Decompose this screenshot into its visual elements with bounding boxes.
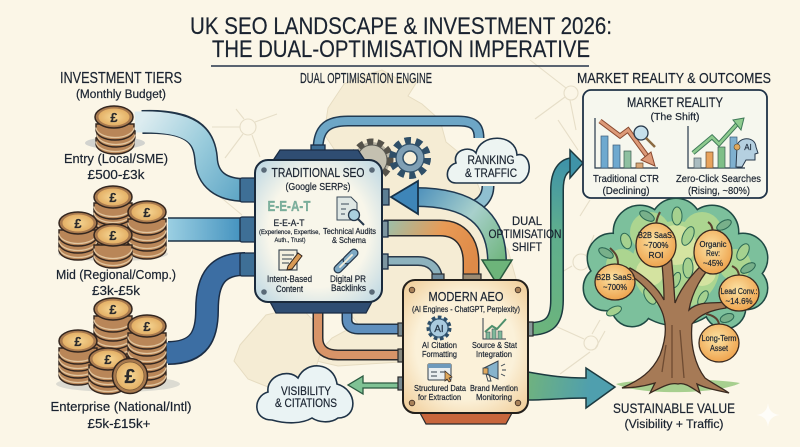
title: THE DUAL-OPTIMISATION IMPERATIVE (212, 36, 590, 63)
item: eeat: (Experience, Expertise, (259, 229, 320, 236)
apple: b2b saas roi: B2B SaaS: (638, 231, 674, 240)
label: enterprise tier (50, 400, 192, 431)
label: enterprise tier: Enterprise (National/Intl) (50, 400, 192, 414)
panel: market reality: MARKET REALITY (627, 95, 723, 110)
label: sustainable value (613, 400, 735, 431)
apple: b2b saas roi: ROI (648, 251, 664, 260)
label: mid tier: Mid (Regional/Comp.) (56, 268, 176, 282)
item: digital pr (330, 274, 367, 293)
icon: eeat: E-E-A-T (268, 198, 310, 215)
coins: entry (85, 106, 145, 154)
panel: modern aeo: MODERN AEO (428, 289, 504, 304)
apple: b2b saas 700: B2B SaaS: (596, 273, 634, 282)
canopy (584, 199, 767, 328)
item: ai citation: AI Citation (422, 340, 457, 350)
item: technical audits: Technical Audits (323, 227, 376, 236)
item: intent-based content: Content (276, 284, 303, 294)
label: zero-click searches (676, 173, 761, 197)
coins: enterprise: £ (104, 352, 112, 367)
coins: enterprise (56, 298, 180, 394)
icon: growth chart (483, 318, 506, 339)
panel: traditional seo (240, 145, 389, 313)
item: technical audits (323, 227, 376, 245)
panel: market reality (583, 90, 767, 198)
connectors (240, 145, 389, 313)
coins: mid (58, 186, 168, 268)
panel: market reality: (The Shift) (650, 111, 700, 123)
panel: modern aeo (398, 274, 533, 424)
item: source and stat (472, 340, 518, 359)
item: structured data (414, 383, 466, 402)
label: dual optimisation shift (488, 216, 562, 254)
label: traditional ctr: (Declining) (602, 185, 650, 197)
arrow: dual optimisation shift (391, 181, 512, 284)
panel: traditional seo: TRADITIONAL SEO (272, 166, 365, 180)
coins: mid: £ (143, 205, 151, 220)
arrow: to visibility (348, 376, 403, 394)
apple: b2b saas roi (636, 209, 676, 267)
gears (354, 141, 427, 178)
item: eeat: E-E-A-T (274, 218, 305, 229)
label: entry tier (64, 152, 168, 182)
apple: organic revenue (694, 218, 733, 274)
apple: lead conversion: ~14.6% (726, 297, 753, 306)
apple: b2b saas 700 (595, 246, 635, 300)
pipe connectors between engines (318, 186, 488, 355)
item: brand mention (470, 383, 518, 402)
item: eeat: Auth., Trust) (274, 237, 306, 244)
pipe: aeo to market reality (528, 150, 583, 329)
icon: pencil note (279, 250, 302, 270)
apple: organic revenue: Rev: (706, 249, 720, 258)
coins: entry: £ (110, 110, 118, 125)
pipe: enterprise tier (166, 264, 245, 353)
label: traditional ctr: Traditional CTR (593, 173, 659, 185)
icon: megaphone (483, 361, 506, 381)
cloud: ranking and traffic: RANKING (468, 155, 515, 167)
item: ai citation: Formatting (422, 349, 457, 359)
ground (616, 379, 740, 392)
item: brand mention: Monitoring (476, 392, 512, 402)
item: digital pr: Backlinks (331, 283, 367, 293)
label: sustainable value: SUSTAINABLE VALUE (613, 400, 735, 416)
apple: long-term asset: Long-Term (702, 334, 736, 343)
apple: long-term asset: Asset (710, 344, 729, 353)
chart: zero-click searches (688, 118, 758, 168)
item: ai citation (422, 340, 457, 359)
item: source and stat: Source & Stat (472, 340, 518, 350)
icon: chain link (338, 253, 354, 269)
label: entry tier: Entry (Local/SME) (64, 152, 168, 166)
coins: enterprise: £ (143, 319, 151, 334)
coins: mid: £ (109, 228, 117, 243)
cloud: visibility and citations: VISIBILITY (281, 384, 331, 398)
label: zero-click searches: (Rising, ~80%) (688, 185, 750, 197)
label: enterprise tier: £5k-£15k+ (88, 417, 150, 431)
pipe: mid tier (168, 218, 246, 241)
label: traditional ctr (593, 173, 659, 197)
apple: lead conversion: Lead Conv.: (720, 287, 758, 296)
network lines (186, 60, 605, 374)
panel: modern aeo: (AI Engines - ChatGPT, Perplexity) (412, 305, 520, 314)
heading: investment tiers: (Monthly Budget) (76, 89, 166, 101)
icon: audit document (337, 197, 364, 225)
label: mid tier: £3k-£5k (92, 284, 141, 298)
item: structured data: Structured Data (414, 383, 466, 393)
item: digital pr: Digital PR (330, 274, 366, 284)
leaves (597, 207, 757, 324)
cloud: ranking and traffic: & TRAFFIC (465, 168, 517, 180)
heading: dual optimisation engine: DUAL OPTIMISATION ENGINE (300, 71, 432, 87)
cloud: visibility and citations (257, 366, 353, 423)
title: UK SEO LANDSCAPE & INVESTMENT 2026: (190, 13, 612, 40)
title (190, 13, 612, 66)
item: intent-based content: Intent-Based (267, 274, 312, 284)
label: mid tier (56, 268, 176, 298)
UK map backdrop (234, 70, 518, 391)
apple: lead conversion (719, 261, 759, 311)
icon: ai gear (428, 318, 450, 338)
panel: traditional seo: (Google SERPs) (286, 181, 350, 193)
label: sustainable value: (Visibility + Traffic) (624, 419, 724, 431)
cloud: visibility and citations: & CITATIONS (275, 396, 337, 410)
coins: enterprise: £ (124, 366, 136, 388)
label: dual optimisation shift: OPTIMISATION (488, 229, 562, 241)
apple: long-term asset (699, 312, 739, 362)
tree: sustainable value (584, 199, 767, 393)
apple: organic revenue: Organic (700, 240, 727, 249)
coins: mid: £ (109, 190, 117, 205)
label: entry tier: £500-£3k (88, 168, 145, 182)
heading: investment tiers (60, 70, 182, 101)
apple: organic revenue: ~45% (703, 259, 723, 268)
label: dual optimisation shift: SHIFT (512, 242, 542, 254)
chart: traditional ctr (595, 118, 658, 168)
label: dual optimisation shift: DUAL (512, 216, 543, 228)
trunk (622, 245, 729, 393)
heading: investment tiers: INVESTMENT TIERS (60, 70, 182, 87)
coins: enterprise: £ (109, 302, 117, 317)
chart: zero-click searches: AI (744, 143, 752, 152)
apple: b2b saas roi: ~700% (644, 241, 669, 250)
item: source and stat: Integration (476, 349, 512, 359)
item: technical audits: & Schema (332, 236, 366, 245)
pipe: entry tier (135, 122, 245, 190)
item: eeat (259, 218, 320, 244)
icon: ai gear: AI (434, 324, 444, 335)
arrow: to sustainable value (528, 368, 615, 408)
item: structured data: for Extraction (418, 392, 461, 402)
coins: mid: £ (74, 216, 82, 231)
label: zero-click searches: Zero-Click Searches (676, 173, 761, 185)
cloud: ranking and traffic (447, 138, 529, 183)
icon: sparkle (756, 403, 780, 427)
icon: data table (428, 364, 452, 382)
coins: enterprise: £ (74, 334, 82, 349)
item: brand mention: Brand Mention (470, 383, 518, 393)
item: intent-based content (267, 274, 312, 294)
pipe: seo to ranking (318, 121, 479, 150)
apple: b2b saas 700: ~700% (603, 283, 627, 292)
